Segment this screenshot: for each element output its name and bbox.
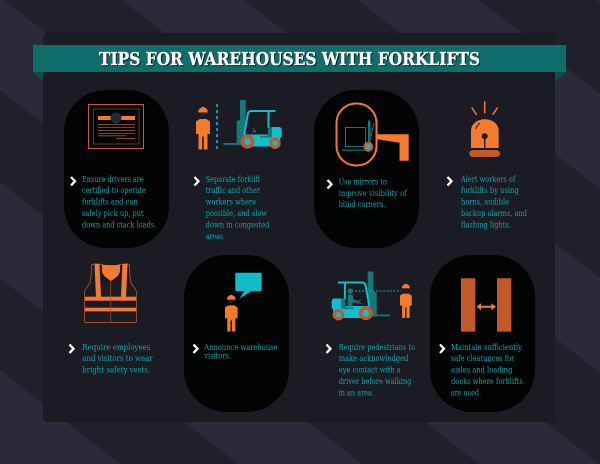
text: tip 4: backup alarms, and [461, 209, 527, 218]
text: tip 1: forklifts and can [82, 198, 138, 207]
text: tip 8: safe clearances for [451, 354, 514, 363]
text: tip 3: improve visibility of [339, 189, 408, 198]
text: tip 8: docks where forklifts [451, 377, 523, 386]
panel: tip 3 mirrors [314, 90, 419, 248]
text: tip 6: Announce warehouse [203, 343, 278, 352]
icon: safety vest [84, 264, 136, 322]
panel: tip 7 eye contact [326, 272, 415, 397]
panel: tip 8 clearances [430, 255, 535, 412]
arrow [440, 344, 444, 353]
panel: tip 4 alerts [448, 102, 527, 229]
icon: aisle clearance [461, 278, 511, 332]
icon: speech bubble [235, 273, 262, 299]
text: tip 6 [203, 343, 278, 360]
icon: forklift [224, 100, 282, 149]
text: tip 1: down and stack loads. [82, 220, 156, 229]
text: tip 2: traffic and other [206, 186, 260, 195]
arrow [70, 344, 74, 353]
title: TIPS FOR WAREHOUSES WITH FORKLIFTS [100, 51, 481, 71]
icon: dashed separator [216, 104, 218, 149]
icon: flashing light [469, 102, 500, 157]
arrow [71, 177, 75, 186]
text: tip 4: forklifts by using [461, 186, 519, 195]
text: tip 2: areas. [206, 232, 225, 241]
text: tip 5: Require employees [82, 343, 150, 352]
text: tip 8: Maintain sufficiently [451, 343, 522, 352]
text: tip 3: Use mirrors to [339, 177, 387, 186]
text: tip 1 [82, 175, 156, 229]
arrow [326, 344, 330, 353]
panel: tip 2 separate traffic [194, 100, 282, 241]
text: tip 8: are used. [451, 388, 481, 397]
text: tip 8 [451, 343, 523, 397]
icon: worker [400, 284, 412, 318]
text: tip 6: visitors. [203, 351, 231, 360]
text: tip 1: safely pick up, put [82, 209, 144, 218]
text: tip 2: down in congested [206, 220, 269, 229]
panel: tip 6 announce visitors [184, 255, 289, 412]
text: tip 3 [339, 177, 408, 209]
arrow [194, 177, 198, 186]
icon: certificate [88, 104, 144, 148]
title: TIPS FOR WAREHOUSES WITH FORKLIFTS [99, 50, 480, 70]
icon: line of sight [355, 290, 401, 292]
icon: worker [196, 107, 210, 150]
arrow [194, 344, 198, 353]
text: tip 7 [339, 343, 415, 397]
text: tip 7: in an area. [339, 388, 374, 397]
text: tip 2: possible, and slow [206, 209, 267, 218]
icon: forklift with driver [332, 272, 390, 320]
text: tip 7: eye contact with a [339, 366, 401, 375]
text: tip 7: driver before walking [339, 377, 411, 386]
arrow [448, 177, 452, 186]
text: tip 8: aisles and loading [451, 366, 512, 375]
text: tip 4: flashing lights. [461, 220, 511, 229]
text: tip 2: Separate forklift [206, 175, 261, 184]
main panel [43, 33, 555, 422]
text: tip 5: bright safety vests. [82, 366, 150, 375]
title banner [33, 45, 566, 82]
text: tip 3: blind corners. [339, 200, 385, 209]
icon: worker [225, 295, 238, 332]
text: tip 7: make acknowledged [339, 354, 408, 363]
text: tip 4: horns, audible [461, 198, 509, 207]
text: tip 2: workers where [206, 198, 256, 207]
text: tip 4: Alert workers of [460, 175, 516, 184]
text: tip 4 [460, 175, 527, 229]
panel: tip 5 safety vests [70, 264, 153, 375]
text: tip 5: and visitors to wear [82, 354, 153, 363]
arrow [328, 180, 332, 188]
panel: tip 1 certified drivers [64, 90, 169, 248]
text: tip 7: Require pedestrians to [339, 343, 415, 352]
text: tip 1: Ensure drivers are [82, 175, 144, 184]
text: tip 5 [82, 343, 153, 375]
icon: mirror [336, 104, 409, 166]
text: tip 2 [206, 175, 269, 241]
text: tip 1: certified to operate [82, 186, 146, 195]
